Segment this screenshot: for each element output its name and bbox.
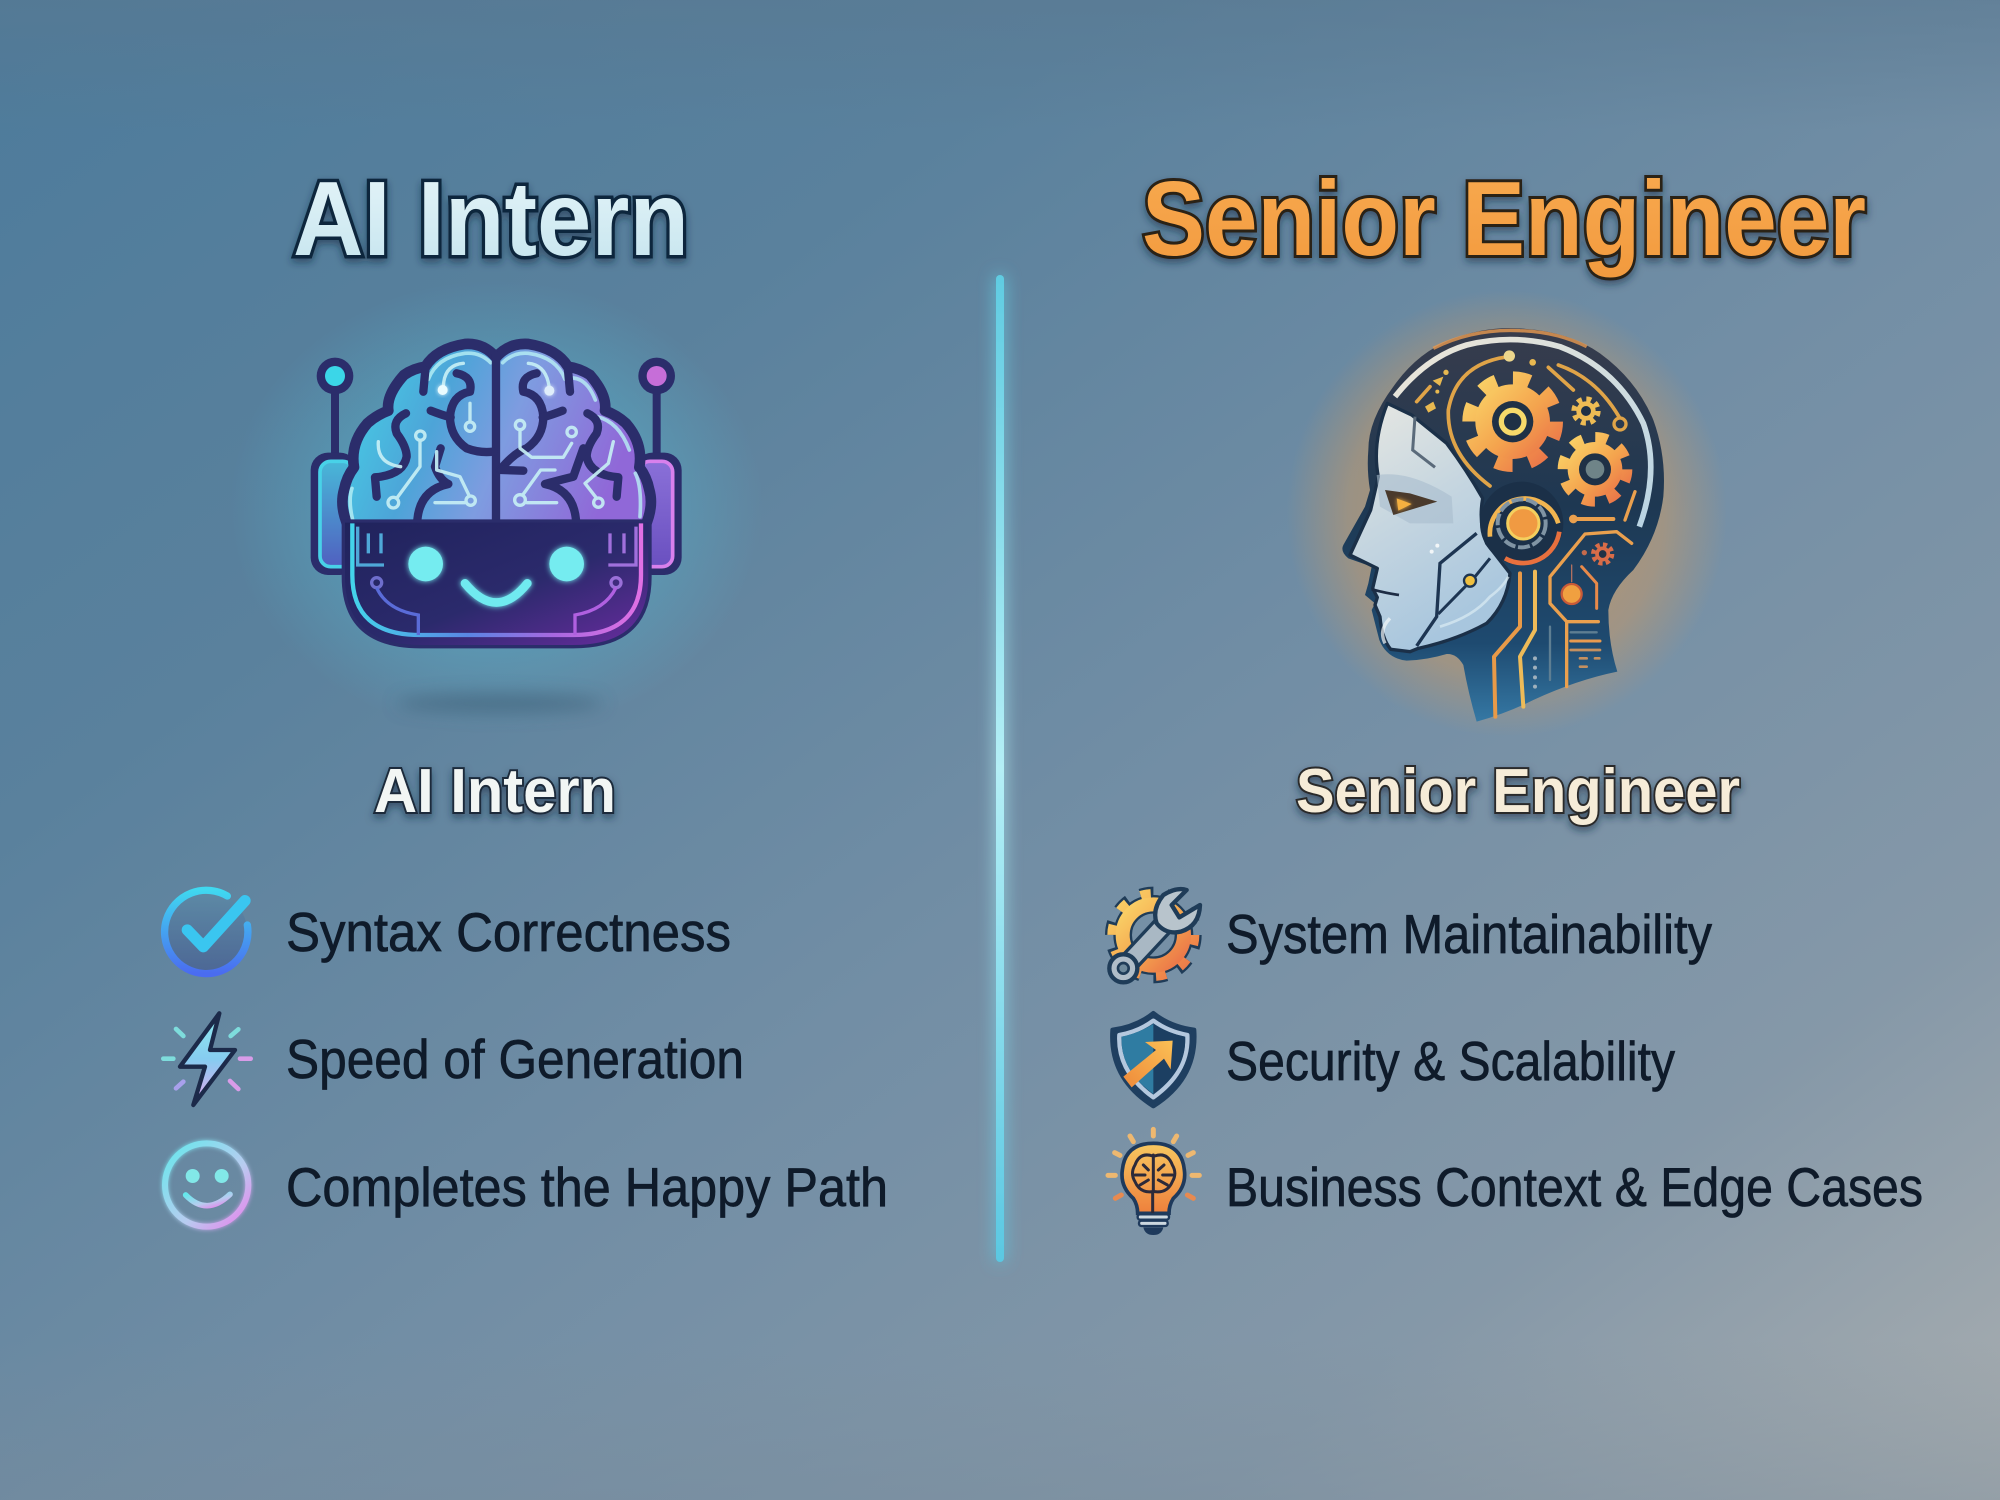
circuit traces (378, 363, 613, 508)
head silhouette (1342, 328, 1664, 722)
item: System Maintainability (1109, 889, 1712, 982)
icon: gear and wrench (1109, 889, 1200, 982)
item: Business Context & Edge Cases (1108, 1129, 1923, 1235)
title: AI Intern: AI Intern (293, 160, 689, 278)
item: Security & Scalability: Security & Scalability (1226, 1030, 1675, 1092)
glow behind robot (230, 280, 763, 733)
face plate (1350, 403, 1510, 652)
list: AI Intern strengths (163, 890, 888, 1227)
icon: engineer head (1287, 290, 1727, 737)
antennas (317, 358, 675, 457)
small markers (1425, 350, 1536, 413)
icon: check circle (165, 890, 248, 974)
item: Completes the Happy Path: Completes the Happy Path (286, 1156, 888, 1218)
item: Business Context & Edge Cases: Business Context & Edge Cases (1226, 1156, 1923, 1218)
orange glow (1287, 290, 1727, 737)
brain (342, 344, 651, 527)
divider (996, 275, 1004, 1262)
central ring (1480, 482, 1563, 565)
skull rim (1395, 340, 1651, 527)
robot face (343, 521, 650, 647)
icon: robot brain (230, 280, 763, 733)
icon: lightbulb brain (1108, 1129, 1199, 1235)
title: Senior Engineer: Senior Engineer (1142, 160, 1866, 278)
neck circuitry (1494, 492, 1635, 717)
item: Syntax Correctness (165, 890, 731, 974)
ground shadow (397, 693, 603, 713)
item: Completes the Happy Path (165, 1143, 888, 1227)
item: Syntax Correctness: Syntax Correctness (286, 901, 731, 963)
ears (311, 453, 682, 575)
icon: smiley (165, 1143, 248, 1227)
circuit arcs (1417, 357, 1626, 486)
subtitle: Senior Engineer: Senior Engineer (1296, 757, 1740, 826)
subtitle: AI Intern: AI Intern (374, 757, 616, 826)
item: Speed of Generation: Speed of Generation (286, 1028, 744, 1090)
list: Senior Engineer strengths (1108, 889, 1923, 1235)
icon: lightning bolt (163, 1013, 251, 1105)
item: Speed of Generation (163, 1013, 744, 1105)
gears (1472, 381, 1625, 563)
item: Security & Scalability (1112, 1013, 1675, 1106)
icon: shield with arrow (1112, 1013, 1194, 1106)
item: System Maintainability: System Maintainability (1226, 903, 1712, 965)
